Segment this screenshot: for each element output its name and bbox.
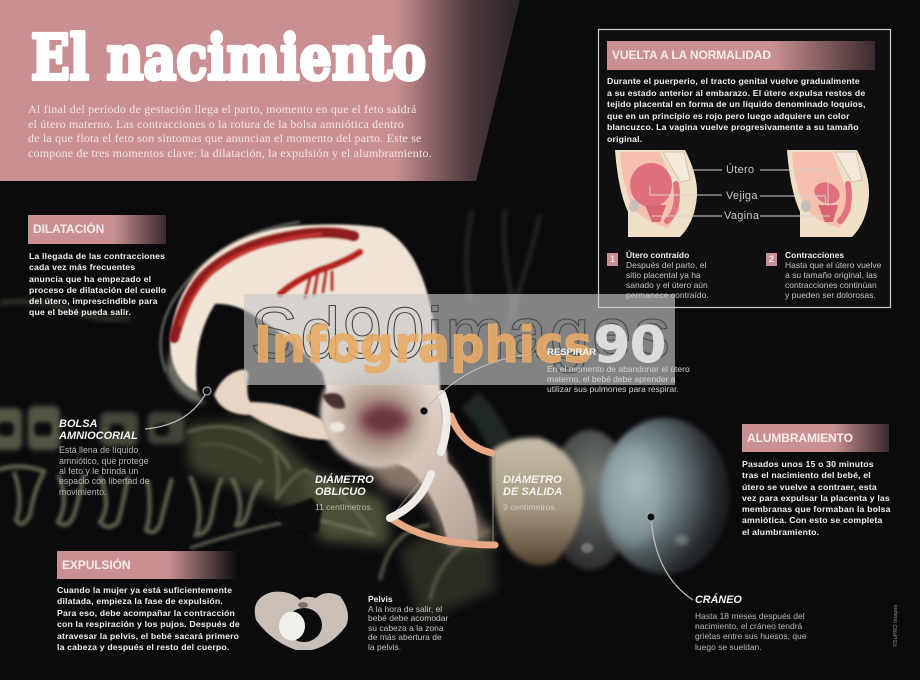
head <box>320 356 436 468</box>
text: alumbramiento: tras el nacimiento del bebé, el <box>742 470 871 480</box>
watermark: 90 <box>594 316 666 374</box>
callout: diámetro de salida: DE SALIDA <box>503 486 562 498</box>
text: vuelta a la normalidad: que en un principio es rojo pero luego adquiere un color <box>607 110 850 120</box>
callout: respirar: RESPIRAR <box>547 347 596 358</box>
text: alumbramiento: Pasados unos 15 o 30 minutos <box>742 459 874 469</box>
callout: diámetro oblicuo: DIÁMETRO <box>315 474 374 486</box>
heading: expulsión: EXPULSIÓN <box>62 558 130 572</box>
callout: bolsa amniocorial: Está llena de líquido <box>59 445 138 455</box>
callout: diámetro oblicuo: 11 centímetros. <box>315 502 373 512</box>
intro text: Al final del período de gestación llega el parto, momento en que el feto saldrá <box>28 102 417 116</box>
callout: cráneo: luego se sueldan. <box>695 642 762 652</box>
callout: cráneo: grietas entre sus huesos, que <box>695 631 807 641</box>
label: útero: Útero <box>726 164 754 176</box>
text: pelvis <box>368 594 448 652</box>
number 1: 1 <box>610 254 615 264</box>
text: expulsión: Cuando la mujer ya está suficientemente <box>57 585 232 595</box>
header panel <box>0 0 520 181</box>
box: vuelta a la normalidad <box>598 30 890 308</box>
pelvis icon <box>255 592 348 650</box>
text: vuelta a la normalidad: tejido placental en forma de un líquido denominado loquios, <box>607 99 866 109</box>
step 1 text: sanado y el útero aún <box>626 280 708 290</box>
label lines <box>650 170 830 216</box>
text: dilatación: del útero, imprescindible para <box>29 296 158 306</box>
callout: respirar: utilizar sus pulmones para respirar. <box>547 384 679 394</box>
callout: bolsa amniocorial: amniótico, que protege <box>59 456 148 466</box>
text: vuelta a la normalidad: Durante el puerperio, el tracto genital vuelve gradualmente <box>607 76 860 86</box>
text: alumbramiento: vez para expulsar la placenta y las <box>742 493 890 503</box>
intro text <box>28 102 432 160</box>
callout: diámetro de salida: DIÁMETRO <box>503 474 562 486</box>
text: alumbramiento: el alumbramiento. <box>742 527 819 537</box>
step 1 text <box>626 250 709 300</box>
step 2 text: y pueden ser dolorosas. <box>785 290 876 300</box>
text: pelvis: de más abertura de <box>368 632 442 642</box>
text: dilatación <box>29 251 166 317</box>
step 2 text: contracciones continúan <box>785 280 877 290</box>
heading: alumbramiento: ALUMBRAMIENTO <box>747 431 853 445</box>
text: vuelta a la normalidad: blancuzco. La vagina vuelve progresivamente a su tamaño <box>607 122 859 132</box>
text: vuelta a la normalidad: a su estado anterior al embarazo. El útero expulsa restos de <box>607 88 865 98</box>
callout: cráneo: CRÁNEO <box>695 594 742 606</box>
number 1 <box>607 253 618 266</box>
intro text: de la que flota el feto son síntomas que anuncian el momento del parto. Este se <box>28 131 422 145</box>
callout: diámetro de salida: 9 centímetros. <box>503 502 557 512</box>
step 1 text: permanece contraído. <box>626 290 709 300</box>
pelvic arcs: oblique and exit diameters <box>390 394 495 545</box>
callout: cráneo: Hasta 18 meses después del <box>695 611 805 621</box>
heading: dilatación <box>28 215 166 244</box>
callout dots <box>203 387 655 521</box>
callout lines <box>145 353 693 600</box>
text: dilatación: La llegada de las contracciones <box>29 251 165 261</box>
text: expulsión: dilatada, empieza la fase de expulsión. <box>57 596 223 606</box>
callout: respirar: materno, el bebé debe aprender a <box>547 374 676 384</box>
label: vagina: Vagina <box>724 210 759 222</box>
text: expulsión: Para eso, debe acompañar la contracción <box>57 608 235 618</box>
step 1 text: sitio placental ya ha <box>626 270 701 280</box>
step 1 text: Después del parto, el <box>626 260 706 270</box>
text: pelvis: Pelvis <box>368 594 393 604</box>
text: pelvis: bebé debe acomodar <box>368 613 448 623</box>
callout: bolsa amniocorial: AMNIOCORIAL <box>59 430 138 442</box>
step 2 text: a su tamaño original, las <box>785 270 877 280</box>
callout: cráneo <box>695 593 807 652</box>
label: vejiga: Vejiga <box>726 190 758 202</box>
callout: bolsa amniocorial: espacio con libertad de <box>59 476 149 486</box>
anatomy diagram left <box>615 150 697 237</box>
red cord <box>174 232 360 338</box>
step 2 text <box>785 250 881 300</box>
callout: bolsa amniocorial: movimiento. <box>59 487 106 497</box>
heading: dilatación: DILATACIÓN <box>33 222 104 236</box>
watermark: Infographics <box>254 316 592 374</box>
callout: cráneo: nacimiento, el cráneo tendrá <box>695 621 802 631</box>
step 1 text: Útero contraído <box>626 250 689 260</box>
callout: bolsa amniocorial: BOLSA <box>59 418 98 430</box>
text: alumbramiento: útero se vuelve a contraer, esta <box>742 482 877 492</box>
text: expulsión: la cabeza y después el resto del cuerpo. <box>57 642 229 652</box>
text: pelvis: A la hora de salir, el <box>368 604 442 614</box>
callout: respirar <box>547 347 690 394</box>
number 2 <box>766 253 777 266</box>
callout: respirar: En el momento de abandonar el útero <box>547 364 690 374</box>
anatomy diagram right <box>787 150 869 237</box>
text: dilatación: que el bebé pueda salir. <box>29 307 131 317</box>
text: vuelta a la normalidad: original. <box>607 134 642 144</box>
text: dilatación: proceso de dilatación del cuello <box>29 285 166 295</box>
heading: expulsión <box>57 551 238 579</box>
text: vuelta a la normalidad <box>607 76 866 144</box>
small foot <box>214 370 330 440</box>
intro text: el útero materno. Las contracciones o la rotura de la bolsa amniótica dentro <box>28 117 404 131</box>
watermark: Sd90images <box>250 294 670 374</box>
skulls <box>492 418 730 574</box>
title: El nacimiento <box>31 21 426 94</box>
credit: ©SuPRO Images <box>893 605 899 647</box>
callout: diámetro de salida <box>503 473 562 512</box>
text: alumbramiento <box>742 459 891 537</box>
callout: diámetro oblicuo: OBLICUO <box>315 486 366 498</box>
callout: diámetro oblicuo <box>315 473 374 512</box>
text: dilatación: cada vez más frecuentes <box>29 262 135 272</box>
heading: vuelta a la normalidad: VUELTA A LA NORMALIDAD <box>612 48 771 62</box>
heading: alumbramiento <box>742 424 889 452</box>
text: expulsión: con la respiración y los pujos. Después de <box>57 619 240 629</box>
spine illustration <box>0 302 495 620</box>
callout: bolsa amniocorial <box>58 418 150 497</box>
text: pelvis: la pelvis. <box>368 642 401 652</box>
fetus <box>161 222 492 546</box>
text: pelvis: su cabeza a la zona <box>368 623 444 633</box>
text: expulsión: atravesar la pelvis, el bebé sacará primero <box>57 631 239 641</box>
text: alumbramiento: membranas que formaban la bolsa <box>742 504 891 514</box>
callout: bolsa amniocorial: al feto y le brinda un <box>59 466 138 476</box>
text: alumbramiento: amniótica. Con esto se completa <box>742 515 882 525</box>
intro text: compone de tres momentos clave: la dilatación, la expulsión y el alumbramiento. <box>28 146 432 160</box>
text: dilatación: anuncia que ha empezado el <box>29 274 151 284</box>
number 2: 2 <box>769 254 774 264</box>
heading: vuelta a la normalidad <box>607 41 875 70</box>
text: expulsión <box>57 585 240 652</box>
step 2 text: Contracciones <box>785 250 844 260</box>
step 2 text: Hasta que el útero vuelve <box>785 260 881 270</box>
background strands <box>466 210 540 445</box>
